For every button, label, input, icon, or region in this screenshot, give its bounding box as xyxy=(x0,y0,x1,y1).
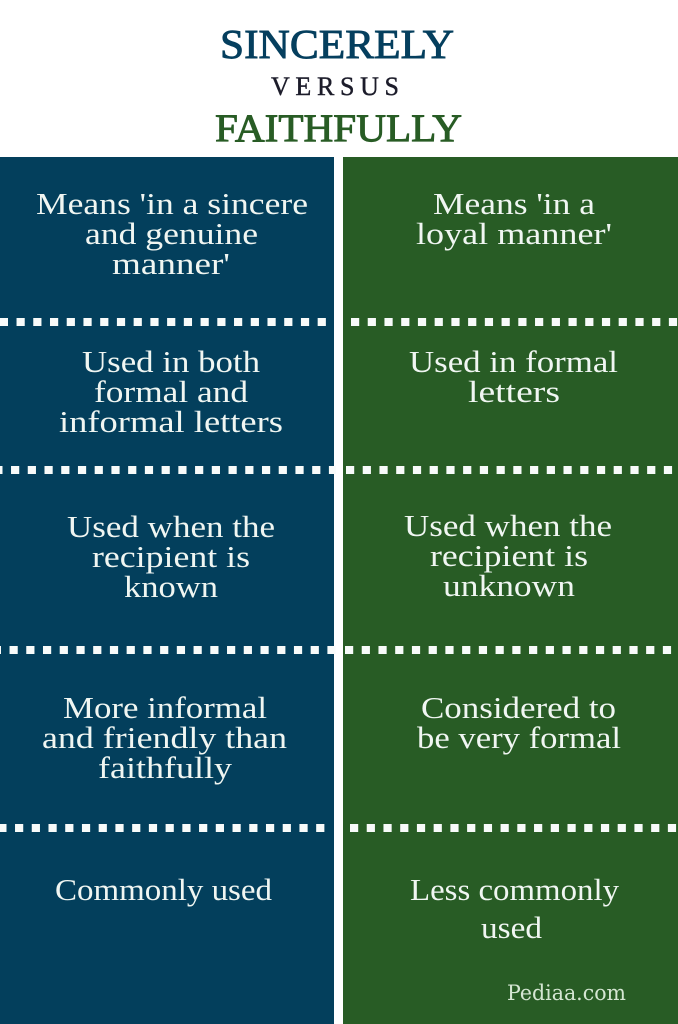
text: usage in letters: Used in formal xyxy=(409,344,618,379)
text: recipient: recipient is xyxy=(92,539,250,574)
title block xyxy=(215,21,462,150)
text: usage in letters: informal letters xyxy=(59,404,283,439)
text: recipient: unknown xyxy=(443,568,576,603)
text: meaning: Means 'in a sincere xyxy=(36,186,308,221)
text: meaning: Means 'in a xyxy=(433,186,595,221)
text: usage in letters xyxy=(59,344,283,439)
text: meaning xyxy=(36,186,308,281)
text: formality: faithfully xyxy=(98,750,233,785)
text: usage in letters: formal and xyxy=(94,374,249,409)
text: formality: and friendly than xyxy=(42,720,288,755)
text: formality: Considered to xyxy=(421,690,616,725)
text: usage in letters: Used in both xyxy=(82,344,261,379)
panel: faithfully column xyxy=(343,157,678,1024)
text: usage in letters xyxy=(409,344,618,409)
heading: faithfully: FAITHFULLY xyxy=(215,107,462,150)
text: recipient: Used when the xyxy=(404,508,612,543)
text: frequency: used xyxy=(481,910,543,945)
text: recipient: recipient is xyxy=(430,538,588,573)
text: formality xyxy=(417,690,621,755)
text: recipient xyxy=(67,509,275,604)
heading: versus: VERSUS xyxy=(271,72,399,101)
logo: pediaa.com: Pediaa.com xyxy=(507,981,626,1005)
text: meaning: manner' xyxy=(112,246,230,281)
text: frequency: Less commonly xyxy=(410,872,620,907)
heading: sincerely: SINCERELY xyxy=(220,21,454,67)
text: formality xyxy=(42,690,288,785)
text: meaning xyxy=(416,186,612,251)
text: frequency xyxy=(410,872,620,945)
text: meaning: and genuine xyxy=(85,216,258,251)
text: meaning: loyal manner' xyxy=(416,216,612,251)
text: formality: More informal xyxy=(63,690,267,725)
text: recipient: known xyxy=(124,569,219,604)
text: frequency: Commonly used xyxy=(55,872,273,907)
text: usage in letters: letters xyxy=(468,374,560,409)
text: formality: be very formal xyxy=(417,720,621,755)
text: recipient xyxy=(404,508,612,603)
text: recipient: Used when the xyxy=(67,509,275,544)
panel: sincerely column xyxy=(0,157,334,1024)
